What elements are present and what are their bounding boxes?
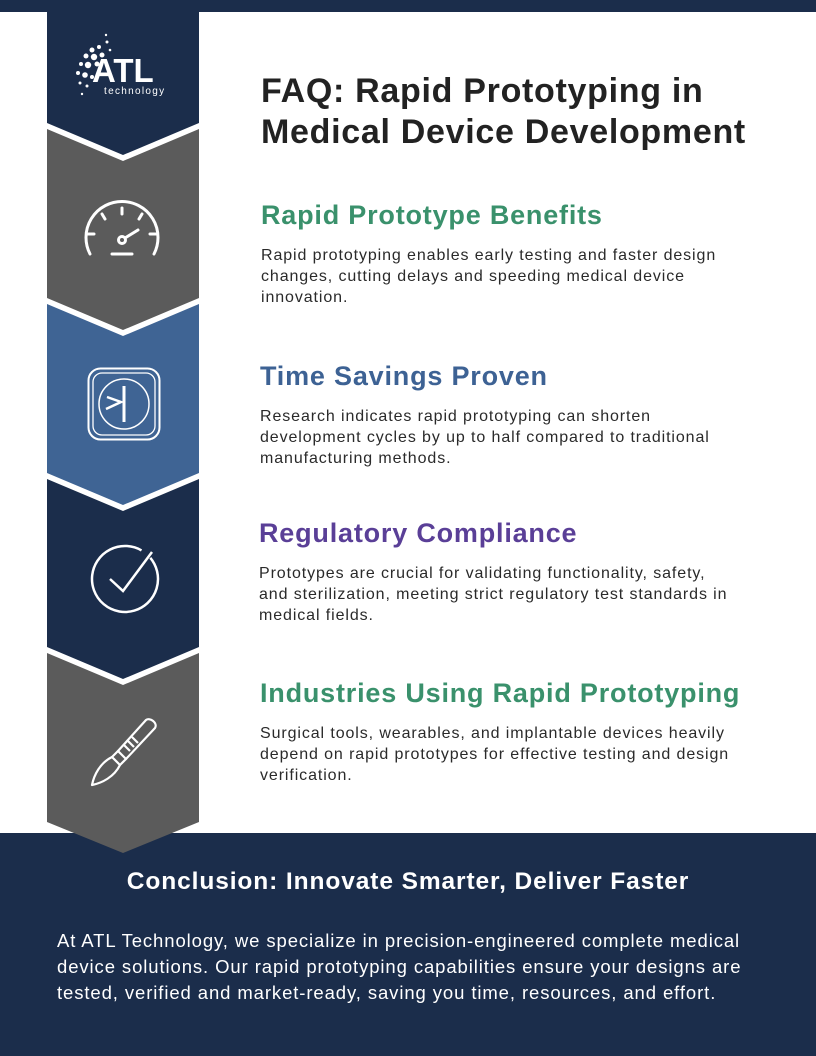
section: time savings xyxy=(260,361,710,467)
text: benefits xyxy=(261,247,716,306)
footer heading: Conclusion: Innovate Smarter, Deliver Faster xyxy=(127,868,689,895)
footer text: tested, verified and market-ready, saving you time, resources, and effort. xyxy=(57,982,716,1003)
footer text xyxy=(57,930,741,1003)
logo: technology xyxy=(104,86,165,97)
heading: regulatory: Regulatory Compliance xyxy=(259,518,577,548)
title: Medical Device Development xyxy=(261,113,746,151)
title: FAQ: Rapid Prototyping in xyxy=(261,72,703,110)
text: regulatory xyxy=(259,565,727,624)
heading: benefits: Rapid Prototype Benefits xyxy=(261,200,603,230)
text: industries: Surgical tools, wearables, and implantable devices heavily xyxy=(260,725,725,742)
text: benefits: Rapid prototyping enables early testing and faster design xyxy=(261,247,716,264)
logo xyxy=(76,34,165,97)
text: regulatory: and sterilization, meeting strict regulatory test standards in xyxy=(259,586,727,603)
section: regulatory xyxy=(259,518,727,624)
footer panel: conclusion xyxy=(0,833,816,1056)
top band xyxy=(0,0,816,12)
footer text: At ATL Technology, we specialize in precision-engineered complete medical xyxy=(57,930,740,951)
text: time savings: development cycles by up to half compared to traditional xyxy=(260,429,710,446)
icon: scalpel xyxy=(90,718,157,786)
section: industries xyxy=(260,678,740,784)
text: industries: verification. xyxy=(260,767,353,784)
title xyxy=(261,72,746,151)
text: regulatory: medical fields. xyxy=(259,607,374,624)
heading: industries: Industries Using Rapid Prototyping xyxy=(260,678,740,708)
section: benefits xyxy=(261,200,716,306)
text: regulatory: Prototypes are crucial for validating functionality, safety, xyxy=(259,565,705,582)
icon: clock xyxy=(88,368,160,440)
footer text: device solutions. Our rapid prototyping capabilities ensure your designs are xyxy=(57,956,741,977)
logo: ATL xyxy=(92,52,154,89)
text: time savings xyxy=(260,408,710,467)
text: time savings: manufacturing methods. xyxy=(260,450,451,467)
icon: check circle xyxy=(90,544,160,614)
text: industries xyxy=(260,725,729,784)
icon: speedometer xyxy=(84,200,160,256)
text: time savings: Research indicates rapid prototyping can shorten xyxy=(260,408,651,425)
text: benefits: innovation. xyxy=(261,289,348,306)
heading: time savings: Time Savings Proven xyxy=(260,361,548,391)
text: industries: depend on rapid prototypes for effective testing and design xyxy=(260,746,729,763)
text: benefits: changes, cutting delays and speeding medical device xyxy=(261,268,685,285)
